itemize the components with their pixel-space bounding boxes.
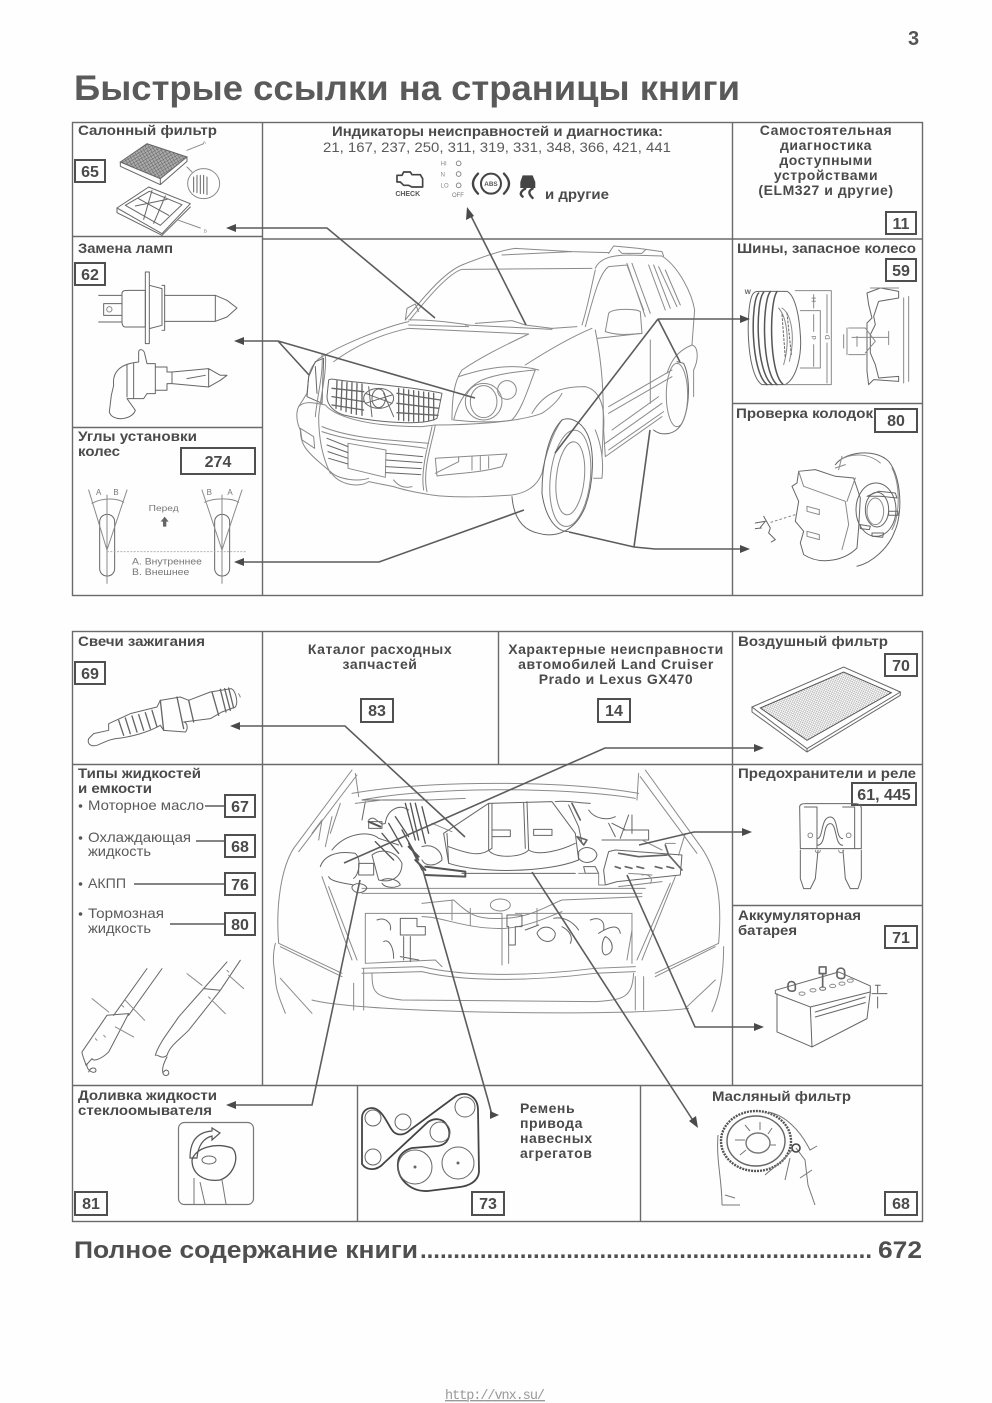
- engine left cluster: [320, 798, 465, 893]
- page ref 83: 83: [368, 703, 386, 720]
- heading: typical faults: автомобилей Land Cruiser: [518, 656, 714, 672]
- page ref 70: [885, 654, 917, 676]
- arrow: to wheel alignment: [234, 510, 524, 566]
- heading: self diagnosis: устройствами: [774, 167, 878, 183]
- heading: lamp replacement: Замена ламп: [78, 241, 173, 256]
- page ref 62: [75, 263, 105, 285]
- icon: battery: [775, 967, 887, 1047]
- footer: full contents line: ....................................................................: [420, 1237, 872, 1264]
- item: coolant: 68: [231, 839, 249, 856]
- rear wheel: [654, 362, 688, 434]
- icons: warning lamps: N: [441, 172, 445, 178]
- icons: warning lamps: CHECK: [395, 191, 420, 198]
- heading: self diagnosis: диагностика: [780, 137, 872, 153]
- diagram: wheel alignment: A. Внутреннее: [132, 556, 202, 566]
- grille: [327, 379, 442, 423]
- page ref 14: [598, 699, 630, 722]
- footer: full contents line: 672: [878, 1237, 922, 1264]
- heading: brake pads: Проверка колодок: [736, 406, 873, 421]
- page ref 73: 73: [479, 1196, 497, 1213]
- item: engine oil: Моторное масло: [88, 797, 204, 813]
- item: coolant: Охлаждающая: [88, 829, 191, 845]
- heading: fluids: Типы жидкостей: [78, 766, 201, 781]
- icons: warning lamps: OFF: [452, 193, 464, 199]
- diagram: tyre and rim: H: [811, 297, 818, 302]
- diagram: wheel alignment: Перед: [149, 503, 179, 513]
- heading: wheel alignment: Углы установки: [78, 429, 197, 444]
- heading: self diagnosis: Самостоятельная: [760, 122, 892, 138]
- panel: washer fluid: [75, 1088, 254, 1215]
- page ref 11: [886, 212, 916, 234]
- panel: tyres: [737, 241, 916, 385]
- item: automatic transmission: [79, 873, 255, 895]
- diagram: wheel alignment: B: [113, 488, 119, 497]
- engine right cluster: [355, 800, 682, 887]
- page ref 71: 71: [892, 930, 910, 947]
- item: brake fluid: жидкость: [88, 920, 151, 936]
- heading: oil filter: Масляный фильтр: [712, 1089, 851, 1104]
- title: Быстрые ссылки на страницы книги: [74, 69, 740, 108]
- icon: cabin filter: B: [204, 229, 208, 235]
- label: drive belt: привода: [520, 1115, 583, 1131]
- icons: warning lamps: [395, 161, 535, 199]
- panel: parts catalogue: [308, 641, 452, 722]
- footer: full contents line: [74, 1237, 922, 1264]
- item: brake fluid: Тормозная: [88, 905, 164, 921]
- heading: cabin filter: Салонный фильтр: [78, 123, 217, 138]
- page ref 70: 70: [892, 658, 910, 675]
- panel: battery: батарея: [738, 923, 797, 938]
- panel: wheel alignment: [78, 429, 255, 583]
- diagram: wheel alignment: B: [207, 488, 212, 497]
- page ref 274: 274: [205, 454, 231, 471]
- page ref 83: [361, 699, 393, 722]
- page ref 71: [885, 926, 917, 948]
- arrow: to air filter: [344, 744, 764, 863]
- icon: spark plug: [88, 688, 240, 746]
- illustration: engine bay: [273, 770, 724, 1013]
- page ref 274: [181, 448, 255, 474]
- diagram: tyre and rim: D: [824, 335, 831, 340]
- page ref 68: 68: [892, 1196, 910, 1213]
- icons: warning lamps: LO: [441, 184, 449, 190]
- icon: blade fuse: [800, 804, 861, 889]
- heading: parts catalogue: запчастей: [343, 656, 417, 672]
- diagram: tyre and rim: d: [811, 336, 818, 340]
- arrow: to lamps: [234, 337, 475, 398]
- diagram: tyre and rim: [745, 288, 909, 385]
- arrow: to oil filter: [532, 872, 698, 1128]
- item: engine oil: [79, 795, 255, 817]
- page ref 73: [472, 1192, 504, 1215]
- upper panel frame: [72, 122, 922, 596]
- icon: halogen bulbs: [99, 272, 237, 419]
- page ref 59: [886, 259, 916, 281]
- page ref 81: 81: [82, 1196, 100, 1213]
- icon: cabin filter: [117, 140, 220, 235]
- page ref 81: [75, 1192, 107, 1215]
- icon: oil filter with hand: [718, 1111, 817, 1205]
- label: drive belt: агрегатов: [520, 1145, 592, 1161]
- page ref 14: 14: [605, 703, 623, 720]
- item: automatic transmission: 76: [231, 877, 249, 894]
- panel: typical faults: [508, 641, 724, 722]
- icon: dipsticks: [82, 960, 244, 1076]
- page ref 65: [75, 160, 105, 182]
- diagram: wheel alignment: A: [96, 488, 102, 497]
- panel: fluids: и емкости: [78, 781, 152, 796]
- panel: battery: [738, 908, 917, 1047]
- engine cover: [444, 802, 579, 873]
- panel: washer fluid: стеклоомывателя: [78, 1103, 212, 1118]
- icon: air filter: [752, 667, 900, 752]
- arrow: to cabin filter: [226, 224, 435, 318]
- heading: parts catalogue: Каталог расходных: [308, 641, 452, 657]
- icon: brake caliper and disc: [755, 453, 900, 566]
- item: coolant: [79, 829, 255, 859]
- arrow: to fuses: [639, 828, 752, 845]
- panel: drive belt: [362, 1094, 593, 1215]
- label: drive belt: навесных: [520, 1130, 593, 1146]
- headlights: [307, 358, 535, 422]
- page ref 69: [75, 662, 105, 684]
- heading: battery: Аккумуляторная: [738, 908, 861, 923]
- page ref 11: 11: [893, 216, 910, 233]
- panel: cabin filter: [75, 123, 220, 235]
- page ref 61, 445: [852, 783, 916, 805]
- heading: indicators: Индикаторы неисправностей и диагностика:: [332, 124, 663, 139]
- icon: cabin filter: A: [203, 140, 207, 146]
- diagram: wheel alignment: [89, 488, 247, 583]
- icon: washer reservoir cap: [178, 1122, 254, 1204]
- arrow: to washer fluid: [226, 880, 360, 1109]
- diagram: wheel alignment: B. Внешнее: [132, 567, 189, 577]
- icons: warning lamps: HI: [441, 161, 447, 167]
- page ref 65: 65: [81, 164, 99, 181]
- arrow: to drive belt: [422, 867, 499, 1119]
- page ref 68: [885, 1192, 917, 1215]
- bumper and guard: [299, 355, 562, 492]
- page ref 59: 59: [892, 263, 910, 280]
- heading: typical faults: Характерные неисправности: [508, 641, 724, 657]
- page ref 80: 80: [887, 413, 905, 430]
- heading: self diagnosis: доступными: [779, 152, 873, 168]
- panel: spark plugs: [75, 634, 240, 746]
- front wheel: [512, 419, 603, 535]
- diagram: tyre and rim: W: [745, 289, 752, 296]
- panel: oil filter: [712, 1089, 917, 1215]
- page number: 3: [908, 28, 919, 50]
- item: automatic transmission: АКПП: [88, 875, 126, 891]
- lower panel frame: [72, 631, 922, 1222]
- icons: warning lamps: ABS: [484, 181, 498, 188]
- item: brake fluid: [79, 905, 255, 936]
- footer: full contents line: Полное содержание книги: [74, 1237, 418, 1264]
- diagram: wheel alignment: A: [227, 488, 233, 497]
- panel: fluids: [78, 766, 255, 1076]
- heading: self diagnosis: (ELM327 и другие): [758, 182, 894, 198]
- panel: fuses and relays: [738, 766, 917, 889]
- label: drive belt: Ремень: [520, 1100, 575, 1116]
- panel: air filter: [738, 634, 917, 752]
- heading: typical faults: Prado и Lexus GX470: [539, 671, 693, 687]
- label: and others: и другие: [545, 187, 610, 202]
- heading: spark plugs: Свечи зажигания: [78, 634, 205, 649]
- panel: self diagnosis: [758, 122, 916, 234]
- arrow: to tyres: [555, 315, 750, 453]
- page ref 61, 445: 61, 445: [857, 787, 911, 804]
- panel: brake pads: [736, 406, 917, 566]
- panel: wheel alignment: колес: [78, 444, 121, 459]
- panel: lamp replacement: [75, 241, 237, 419]
- panel: diagnostics indicators: [323, 124, 671, 202]
- item: brake fluid: 80: [231, 917, 249, 934]
- heading: tyres: Шины, запасное колесо: [737, 241, 916, 256]
- item: engine oil: 67: [231, 799, 249, 816]
- heading: fuses: Предохранители и реле: [738, 766, 917, 781]
- page ref 69: 69: [81, 666, 99, 683]
- page ref 80: [875, 409, 917, 432]
- item: coolant: жидкость: [88, 843, 151, 859]
- page list: 21, 167, 237, 250, 311, 319, 331, 348, 366, 421, 441: [323, 140, 671, 155]
- arrow: to brake pads: [569, 430, 750, 553]
- heading: washer fluid: Доливка жидкости: [78, 1088, 217, 1103]
- arrow: to battery: [627, 875, 764, 1031]
- page ref 62: 62: [81, 267, 99, 284]
- arrow: to spark plugs: [230, 722, 465, 837]
- icon: drive belt diagram: [362, 1094, 479, 1191]
- illustration: Land Cruiser Prado front view: [297, 246, 697, 535]
- heading: air filter: Воздушный фильтр: [738, 634, 888, 649]
- arrow: to indicators: [466, 207, 526, 325]
